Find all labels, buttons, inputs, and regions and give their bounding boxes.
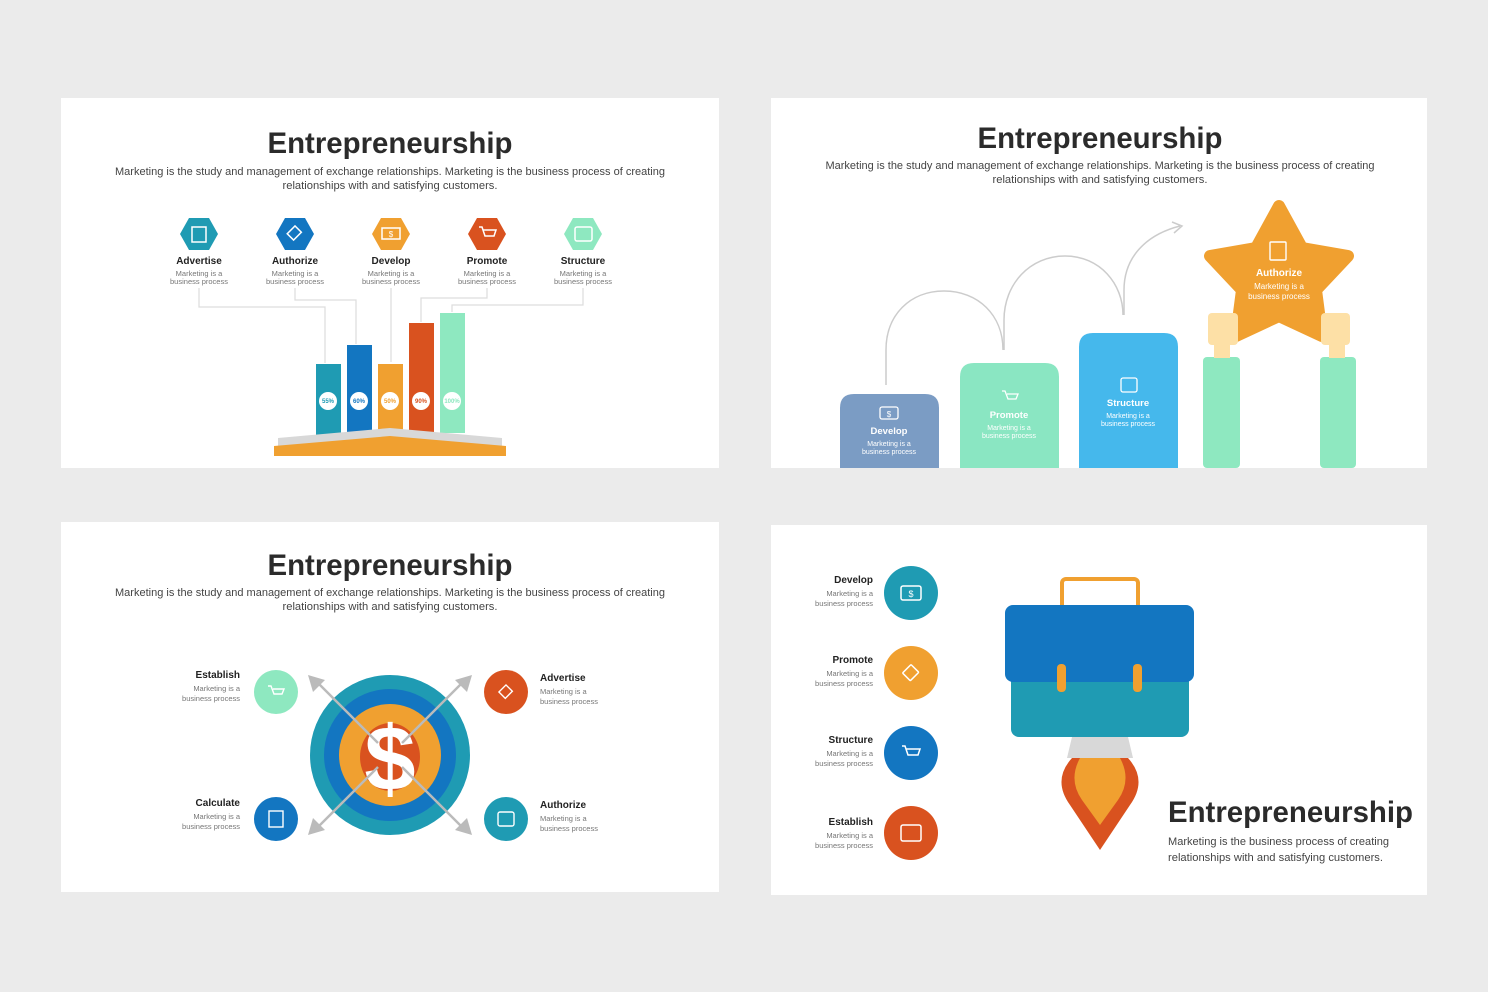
labels: business process — [266, 277, 324, 286]
labels: Marketing is a — [272, 269, 319, 278]
list: Structure: Marketing is a — [826, 749, 874, 758]
book — [274, 428, 506, 456]
bar chart: 100% — [444, 399, 460, 405]
briefcase rocket — [1005, 579, 1194, 850]
item: Authorize — [484, 797, 598, 841]
labels: Structure — [561, 256, 606, 267]
title: Entrepreneurship — [268, 549, 512, 582]
item: Advertise: business process — [540, 697, 598, 706]
subtitle: relationships with and satisfying customers. — [992, 174, 1208, 186]
target — [308, 675, 472, 835]
labels: Develop — [372, 256, 410, 267]
subtitle — [115, 587, 665, 613]
list: Establish: business process — [815, 841, 873, 850]
description: Marketing is the business process of creating — [1168, 836, 1389, 848]
subtitle — [115, 166, 665, 192]
star: Authorize: business process — [1248, 292, 1310, 301]
item: Authorize: Marketing is a — [540, 814, 588, 823]
icons: hexagons: $ — [389, 230, 394, 239]
star: Authorize: Authorize — [1256, 268, 1302, 279]
item: Establish — [182, 670, 298, 714]
description — [1168, 836, 1389, 864]
panel: bottom-left target slide — [61, 522, 719, 892]
subtitle — [826, 160, 1374, 186]
list: Promote: Marketing is a — [826, 669, 874, 678]
item: Calculate — [182, 797, 298, 841]
item: Advertise: Advertise — [540, 673, 586, 684]
list: Promote: business process — [815, 679, 873, 688]
list: Develop: business process — [815, 599, 873, 608]
bar chart: 55% — [322, 399, 335, 405]
labels: business process — [170, 277, 228, 286]
labels — [170, 256, 612, 286]
subtitle: Marketing is the study and management of exchange relationships. Marketing is the business process of creating — [115, 166, 665, 178]
title: Entrepreneurship — [978, 122, 1222, 155]
step: Develop: business process — [862, 449, 917, 456]
labels: Marketing is a — [176, 269, 223, 278]
labels: Advertise — [176, 256, 222, 267]
item: Calculate: Calculate — [196, 798, 240, 809]
item: Calculate: business process — [182, 822, 240, 831]
subtitle: relationships with and satisfying customers. — [282, 601, 498, 613]
bar chart: 50% — [384, 399, 397, 405]
step: Promote: business process — [982, 433, 1037, 440]
bar chart: 90% — [415, 399, 428, 405]
labels: business process — [362, 277, 420, 286]
step: Develop: $ — [887, 410, 892, 419]
item: Authorize: business process — [540, 824, 598, 833]
item: Advertise: Marketing is a — [540, 687, 588, 696]
bar chart: 60% — [353, 399, 366, 405]
item: Advertise — [484, 670, 598, 714]
step: Structure: Structure — [1107, 398, 1149, 409]
labels: Marketing is a — [560, 269, 607, 278]
star: Authorize: Marketing is a — [1254, 282, 1304, 291]
panel: top-right steps slide — [771, 98, 1427, 468]
list: Develop: $ — [908, 589, 914, 599]
list: Promote: Promote — [832, 655, 873, 666]
hands — [1208, 313, 1350, 345]
list: Structure: Structure — [829, 735, 873, 746]
step: Structure: Marketing is a — [1106, 413, 1150, 420]
step: Develop: Develop — [871, 426, 908, 437]
description: relationships with and satisfying customers. — [1168, 852, 1383, 864]
list: Establish — [815, 806, 938, 860]
list: Establish: Marketing is a — [826, 831, 874, 840]
step: Promote: Marketing is a — [987, 425, 1031, 432]
panel: bottom-right briefcase rocket slide — [771, 525, 1427, 895]
item: Establish: business process — [182, 694, 240, 703]
item: Authorize: Authorize — [540, 800, 587, 811]
icons: hexagons — [180, 218, 602, 250]
step: Structure — [1079, 333, 1178, 468]
item: Calculate: Marketing is a — [193, 812, 241, 821]
labels: Authorize — [272, 256, 318, 267]
labels: Promote — [467, 256, 508, 267]
bar chart — [316, 313, 465, 436]
arms — [1203, 340, 1356, 468]
list: Develop — [815, 566, 938, 620]
target: $ — [364, 708, 416, 810]
item: Establish: Establish — [196, 670, 240, 681]
subtitle: relationships with and satisfying customers. — [282, 180, 498, 192]
step: Develop: Marketing is a — [867, 441, 911, 448]
labels: Marketing is a — [368, 269, 415, 278]
step: Structure: business process — [1101, 421, 1156, 428]
connector lines — [199, 288, 583, 363]
labels: Marketing is a — [464, 269, 511, 278]
step: Develop — [840, 394, 939, 468]
star: Authorize — [1210, 206, 1348, 336]
item: Establish: Marketing is a — [193, 684, 241, 693]
list: Structure: business process — [815, 759, 873, 768]
list: Establish: Establish — [829, 817, 873, 828]
list: Promote — [815, 646, 938, 700]
panel: top-left bar chart slide — [61, 98, 719, 468]
list: Develop: Develop — [834, 575, 873, 586]
labels: business process — [458, 277, 516, 286]
list: Develop: Marketing is a — [826, 589, 874, 598]
title: Entrepreneurship — [1168, 796, 1413, 829]
arrows: arcs — [886, 222, 1182, 385]
step: Promote: Promote — [990, 410, 1028, 421]
subtitle: Marketing is the study and management of exchange relationships. Marketing is the business process of creating — [115, 587, 665, 599]
labels: business process — [554, 277, 612, 286]
title: Entrepreneurship — [268, 127, 512, 160]
list: Structure — [815, 726, 938, 780]
subtitle: Marketing is the study and management of exchange relationships. Marketing is the business process of creating — [826, 160, 1374, 172]
step: Promote — [960, 363, 1059, 468]
